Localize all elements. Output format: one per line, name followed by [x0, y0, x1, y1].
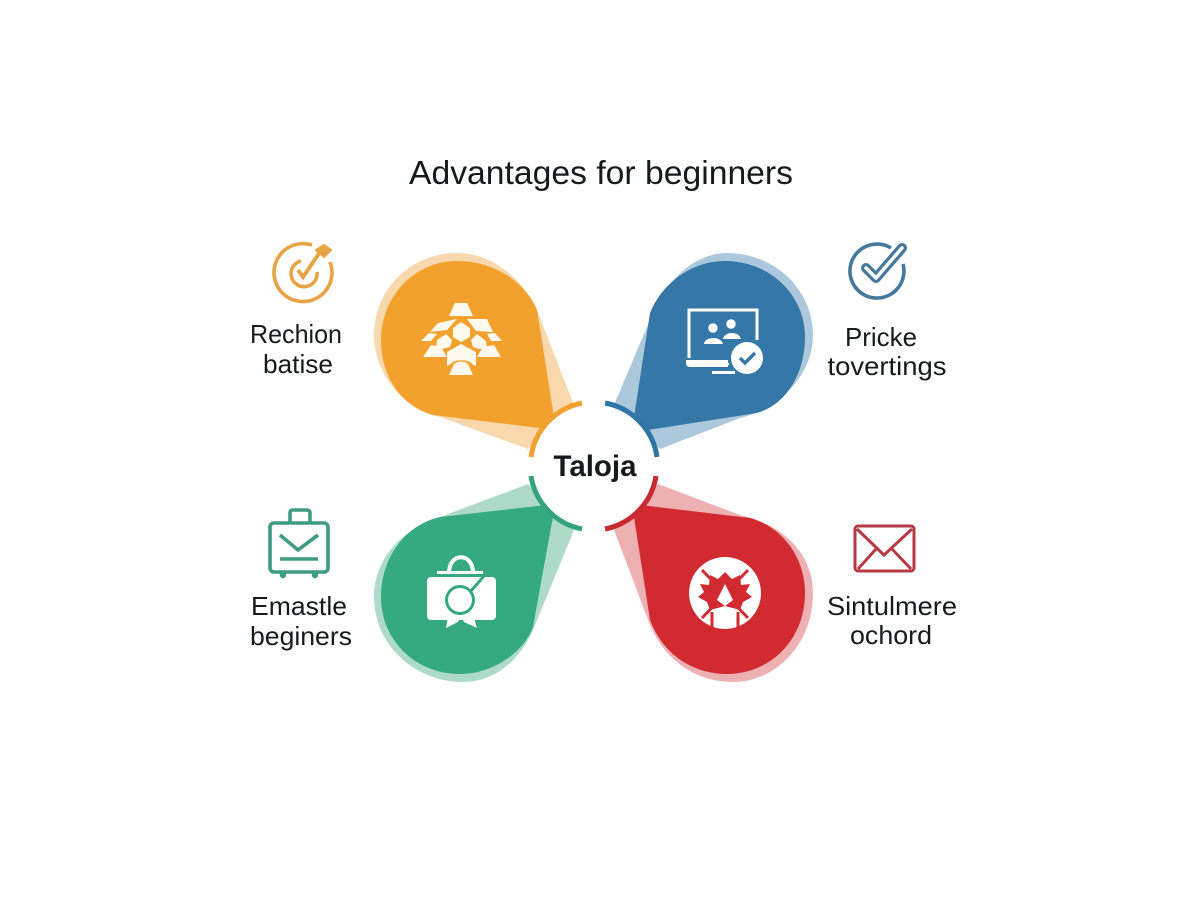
label: Emastle beginers: beginers [250, 621, 352, 651]
panel: orange petal [374, 253, 574, 449]
icon: monitor with people and check [686, 310, 765, 376]
label: Sintulmere ochord [827, 591, 957, 650]
label: Rechion batise: batise [263, 349, 333, 379]
icon: gold bars [421, 303, 502, 375]
centre label: Taloja [554, 450, 637, 483]
icon: check circle [850, 244, 904, 298]
centre disc [531, 403, 657, 529]
label: Pricke tovertings [828, 322, 946, 381]
centre ring [531, 403, 657, 529]
label: Emastle beginers: Emastle [251, 591, 347, 621]
label: Emastle beginers [250, 591, 352, 651]
label: Sintulmere ochord: Sintulmere [827, 591, 957, 621]
panel: green petal [374, 484, 574, 682]
icon: envelope [855, 526, 914, 571]
icon: target with check [274, 244, 332, 302]
icon: emblem in circle [689, 557, 761, 629]
icon: suitcase [270, 510, 328, 578]
label: Sintulmere ochord: ochord [850, 620, 932, 650]
label: Rechion batise: Rechion [250, 319, 342, 349]
label: Pricke tovertings: Pricke [845, 322, 917, 352]
icon: bag with ribbon badge [427, 557, 496, 628]
title: Advantages for beginners [409, 154, 793, 191]
label: Rechion batise [250, 319, 342, 379]
label: Pricke tovertings: tovertings [828, 351, 946, 381]
panel: blue petal [614, 253, 813, 449]
panel: red petal [614, 484, 813, 682]
